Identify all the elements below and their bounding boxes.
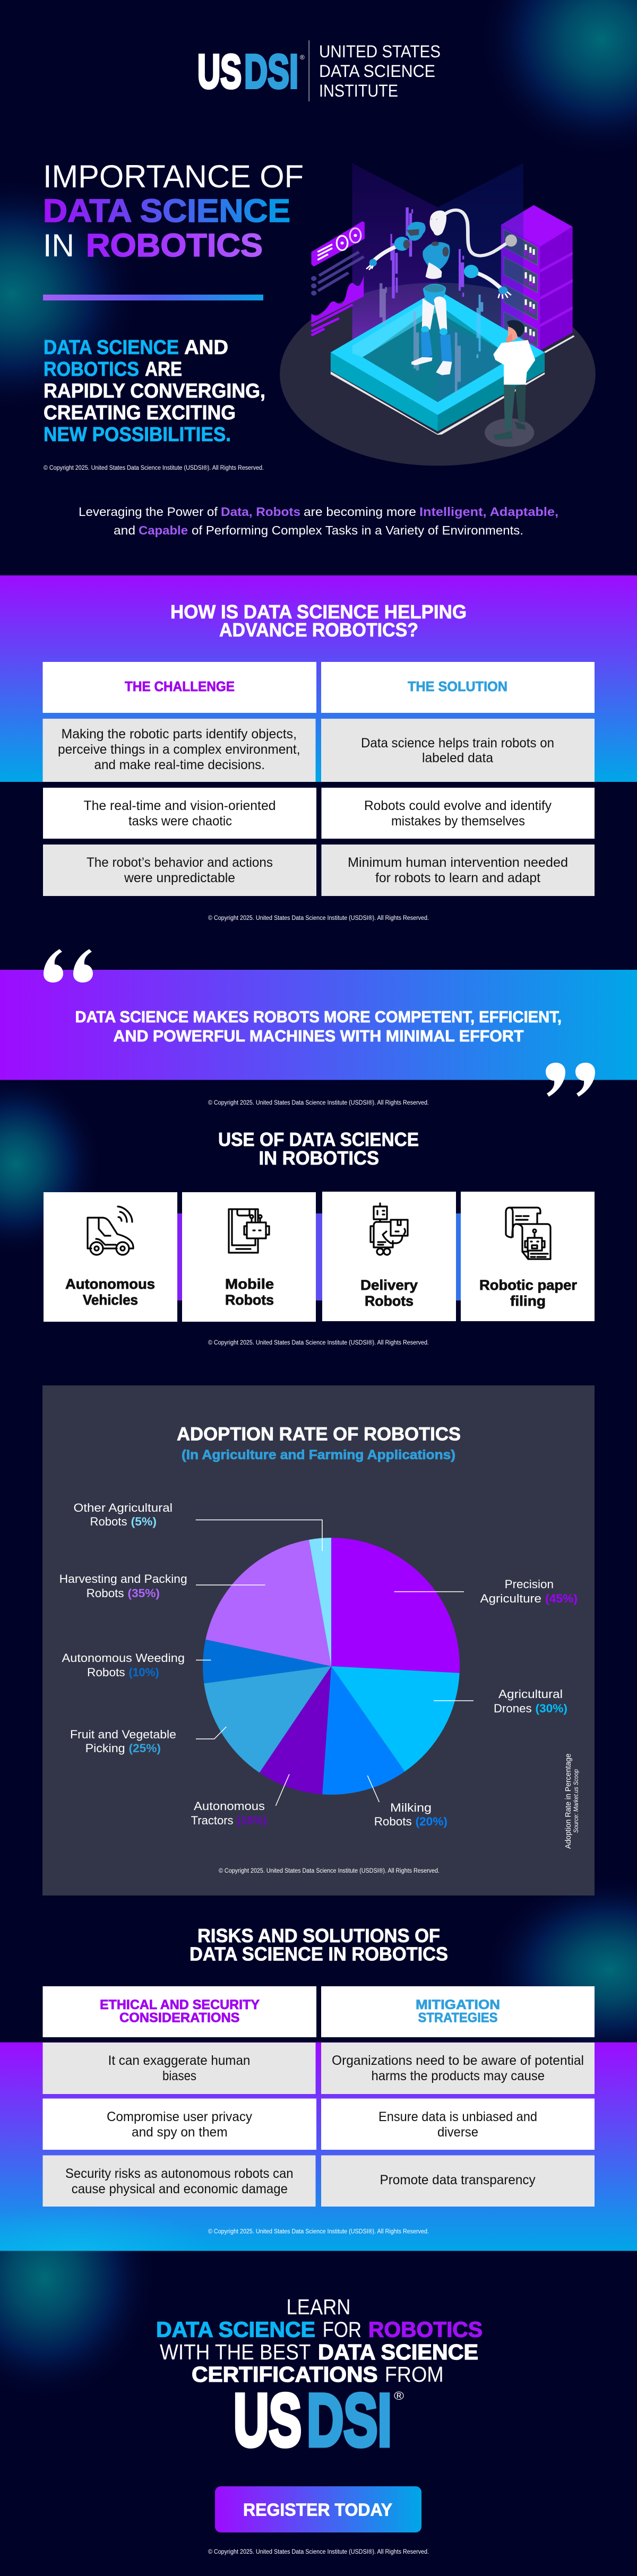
- logo: USDSI header: UNITED STATES: [319, 42, 441, 61]
- logo: USDSI footer: [234, 2378, 404, 2462]
- title underline bar: [43, 295, 263, 300]
- card: autonomous vehicles: Vehicles: [83, 1292, 138, 1308]
- subtitle statement: are becoming more: [304, 505, 416, 519]
- source note: [564, 1754, 580, 1849]
- title: ROBOTICS: [86, 227, 263, 263]
- icon: delivery robot: [371, 1203, 408, 1255]
- card: delivery robots: Robots: [365, 1293, 414, 1309]
- subtitle statement: Data, Robots: [221, 505, 300, 519]
- logo: USDSI footer: ®: [394, 2389, 404, 2402]
- chart heading: (In Agriculture and Farming Applications): [182, 1448, 455, 1462]
- robot: [366, 210, 517, 375]
- label: other agricultural robots: Other Agricultural: [73, 1501, 173, 1514]
- icon: autonomous car: [88, 1207, 133, 1255]
- call to action text: [156, 2295, 483, 2387]
- panel: risks and solutions: [0, 1928, 637, 2251]
- leader lines: [196, 1520, 474, 1806]
- pie chart: [203, 1538, 460, 1795]
- panel: how is data science helping: [0, 575, 637, 896]
- label: autonomous weeding robots: (10%): [128, 1666, 159, 1679]
- card: mobile robots: [182, 1192, 316, 1322]
- button: register today: [215, 2486, 421, 2532]
- table: ethical considerations and mitigation: diverse: [437, 2125, 478, 2140]
- label: fruit and vegetable picking: (25%): [128, 1742, 161, 1755]
- call to action text: ROBOTICS: [368, 2317, 483, 2342]
- chart heading: ADOPTION RATE OF ROBOTICS: [177, 1424, 461, 1445]
- label: other agricultural robots: Robots: [90, 1515, 127, 1528]
- label: fruit and vegetable picking: Fruit and Vegetable: [70, 1728, 176, 1741]
- server rack: [501, 205, 574, 352]
- chart heading: [177, 1424, 461, 1462]
- icon: phone with robot: [229, 1209, 269, 1253]
- card: delivery robots: Delivery: [360, 1277, 418, 1293]
- table: ethical considerations and mitigation: ETHICAL AND SECURITY: [100, 1997, 260, 2012]
- heading: how is data science helping: HOW IS DATA SCIENCE HELPING: [170, 601, 467, 623]
- label: harvesting and packing robots: [59, 1572, 187, 1600]
- table: challenge and solution: THE SOLUTION: [408, 678, 507, 694]
- intro statement: ROBOTICS: [44, 358, 139, 381]
- subtitle statement: Leveraging the Power of: [79, 505, 218, 519]
- card: mobile robots: Mobile: [225, 1276, 274, 1292]
- dashboard widgets: [311, 221, 365, 335]
- label: milking robots: [374, 1801, 447, 1828]
- copyright: © Copyright 2025. United States Data Science Institute (USDSI®). All Rights Reserved.: [208, 1340, 429, 1346]
- engineer: [485, 320, 535, 447]
- title: [43, 159, 304, 263]
- table: ethical considerations and mitigation: harms the products may cause: [372, 2069, 545, 2083]
- logo: USDSI header: ®: [300, 54, 305, 61]
- subtitle statement: Intelligent, Adaptable,: [419, 505, 558, 519]
- subtitle statement: and: [114, 523, 135, 537]
- heading: use of data science: [218, 1128, 419, 1169]
- title: IMPORTANCE OF: [43, 159, 304, 194]
- copyright: © Copyright 2025. United States Data Science Institute (USDSI®). All Rights Reserved.: [208, 2228, 429, 2235]
- table: ethical considerations and mitigation: Promote data transparency: [380, 2173, 536, 2187]
- card: robotic paper filing: [461, 1192, 595, 1321]
- label: precision agriculture: (45%): [545, 1592, 578, 1605]
- table: ethical considerations and mitigation: MITIGATION: [416, 1997, 500, 2012]
- intro statement: ARE: [145, 358, 182, 381]
- copyright: © Copyright 2025. United States Data Science Institute (USDSI®). All Rights Reserved.: [44, 465, 264, 471]
- table: challenge and solution: The real-time and vision-oriented: [84, 798, 276, 813]
- table: challenge and solution: were unpredictable: [124, 871, 235, 885]
- floor ellipse: [280, 282, 596, 466]
- quote text: AND POWERFUL MACHINES WITH MINIMAL EFFORT: [114, 1027, 524, 1045]
- logo: USDSI header: DATA SCIENCE: [319, 62, 435, 81]
- table: challenge and solution: mistakes by themselves: [391, 814, 525, 829]
- label: autonomous tractors: Tractors: [191, 1814, 234, 1827]
- heading: how is data science helping: [170, 601, 467, 641]
- heading: risks and solutions: [190, 1925, 448, 1965]
- copyright: © Copyright 2025. United States Data Science Institute (USDSI®). All Rights Reserved.: [208, 2549, 429, 2555]
- source note: Adoption Rate in Percentage: [564, 1754, 573, 1849]
- label: fruit and vegetable picking: Picking: [85, 1742, 125, 1755]
- subtitle statement: of Performing Complex Tasks in a Variety of Environments.: [192, 523, 523, 537]
- subtitle statement: Capable: [139, 523, 188, 537]
- label: fruit and vegetable picking: [70, 1728, 176, 1755]
- logo: USDSI header: [197, 40, 441, 101]
- table: ethical considerations and mitigation: Compromise user privacy: [107, 2109, 252, 2124]
- heading: risks and solutions: DATA SCIENCE IN ROBOTICS: [190, 1943, 448, 1965]
- table: challenge and solution: Making the robotic parts identify objects,: [62, 727, 297, 742]
- table: challenge and solution: tasks were chaotic: [128, 814, 232, 829]
- card: delivery robots: [322, 1192, 456, 1321]
- table: ethical considerations and mitigation: It can exaggerate human: [108, 2053, 250, 2068]
- table: ethical considerations and mitigation: Ensure data is unbiased and: [378, 2109, 537, 2124]
- source note: Source: Market.us Scoop: [572, 1769, 580, 1833]
- call to action text: FROM: [385, 2362, 444, 2387]
- copyright: © Copyright 2025. United States Data Science Institute (USDSI®). All Rights Reserved.: [219, 1868, 440, 1874]
- heading: use of data science: USE OF DATA SCIENCE: [218, 1128, 419, 1150]
- copyright: © Copyright 2025. United States Data Science Institute (USDSI®). All Rights Reserved.: [208, 915, 429, 921]
- label: other agricultural robots: [73, 1501, 173, 1528]
- icon: opening quote mark: [44, 949, 93, 983]
- illustration: robot, platform, server and engineer: [280, 163, 596, 466]
- copyright: © Copyright 2025. United States Data Science Institute (USDSI®). All Rights Reserved.: [208, 1100, 429, 1106]
- call to action text: DATA SCIENCE: [156, 2317, 315, 2342]
- call to action text: LEARN: [287, 2295, 350, 2319]
- table: challenge and solution: labeled data: [422, 751, 493, 765]
- label: harvesting and packing robots: Robots: [87, 1587, 124, 1600]
- label: precision agriculture: [480, 1578, 578, 1605]
- panel: quote banner: [0, 949, 637, 1097]
- label: other agricultural robots: (5%): [131, 1515, 157, 1528]
- table: challenge and solution: Minimum human intervention needed: [348, 855, 568, 870]
- label: harvesting and packing robots: Harvesting and Packing: [59, 1572, 187, 1586]
- intro statement: RAPIDLY CONVERGING,: [44, 380, 265, 402]
- table: challenge and solution: for robots to learn and adapt: [375, 871, 540, 885]
- label: autonomous weeding robots: Autonomous Weeding: [62, 1651, 185, 1665]
- panel: adoption rate chart: [42, 1385, 595, 1896]
- icon: paper scroll with robot: [506, 1208, 550, 1259]
- table: challenge and solution: THE CHALLENGE: [125, 678, 235, 694]
- table: ethical considerations and mitigation: [42, 1986, 595, 2207]
- table: ethical considerations and mitigation: STRATEGIES: [418, 2011, 498, 2026]
- intro statement: AND: [184, 337, 228, 359]
- table: ethical considerations and mitigation: Security risks as autonomous robots can: [65, 2166, 293, 2181]
- call to action text: WITH THE BEST: [160, 2340, 311, 2364]
- card: mobile robots: Robots: [225, 1292, 274, 1308]
- subtitle statement: [79, 505, 558, 537]
- label: milking robots: Robots: [374, 1815, 412, 1828]
- card: autonomous vehicles: [44, 1192, 177, 1322]
- call to action text: CERTIFICATIONS: [192, 2362, 378, 2387]
- table: challenge and solution: [42, 662, 595, 896]
- intro statement: NEW POSSIBILITIES.: [44, 424, 231, 446]
- data rain: [390, 208, 464, 298]
- table: ethical considerations and mitigation: CONSIDERATIONS: [119, 2011, 240, 2026]
- label: milking robots: (20%): [415, 1815, 447, 1828]
- table: ethical considerations and mitigation: cause physical and economic damage: [72, 2182, 288, 2196]
- label: autonomous weeding robots: [62, 1651, 185, 1679]
- label: harvesting and packing robots: (35%): [127, 1587, 160, 1600]
- label: agricultural drones: [494, 1687, 567, 1715]
- label: autonomous tractors: (15%): [237, 1814, 267, 1827]
- label: autonomous tractors: [191, 1799, 267, 1827]
- label: autonomous weeding robots: Robots: [87, 1666, 125, 1679]
- title: DATA SCIENCE: [43, 193, 290, 229]
- label: precision agriculture: Precision: [505, 1578, 554, 1591]
- label: autonomous tractors: Autonomous: [194, 1799, 265, 1813]
- table: challenge and solution: and make real-time decisions.: [94, 757, 265, 772]
- logo: USDSI footer: US: [234, 2378, 302, 2462]
- intro statement: [44, 337, 265, 446]
- panel: use cases: [44, 1192, 595, 1322]
- label: milking robots: Milking: [390, 1801, 432, 1814]
- intro statement: CREATING EXCITING: [44, 402, 236, 424]
- logo: USDSI footer: DSI: [307, 2378, 392, 2462]
- label: agricultural drones: Agricultural: [498, 1687, 563, 1701]
- call to action text: FOR: [323, 2317, 361, 2342]
- table: challenge and solution: perceive things in a complex environment,: [58, 742, 300, 757]
- intro statement: DATA SCIENCE: [44, 337, 179, 359]
- table: challenge and solution: The robot’s behavior and actions: [87, 855, 273, 870]
- title: IN: [43, 228, 74, 263]
- table: challenge and solution: Data science helps train robots on: [361, 736, 554, 751]
- platform: [331, 290, 545, 435]
- call to action text: DATA SCIENCE: [318, 2340, 478, 2364]
- holographic back panels: [352, 163, 437, 402]
- card: autonomous vehicles: Autonomous: [65, 1276, 155, 1292]
- icon: closing quote mark: [546, 1063, 595, 1097]
- logo: USDSI header: DSI: [244, 46, 298, 99]
- heading: how is data science helping: ADVANCE ROBOTICS?: [219, 619, 418, 641]
- quote text: DATA SCIENCE MAKES ROBOTS MORE COMPETENT, EFFICIENT,: [75, 1007, 562, 1026]
- logo: USDSI header: US: [197, 46, 242, 99]
- logo: USDSI header: INSTITUTE: [319, 81, 398, 100]
- heading: use of data science: IN ROBOTICS: [259, 1147, 379, 1169]
- button: register today: REGISTER TODAY: [243, 2500, 392, 2519]
- heading: risks and solutions: RISKS AND SOLUTIONS OF: [197, 1925, 440, 1946]
- label: precision agriculture: Agriculture: [480, 1592, 541, 1605]
- table: challenge and solution: Robots could evolve and identify: [364, 798, 552, 813]
- quote text: [75, 1007, 562, 1045]
- table: ethical considerations and mitigation: and spy on them: [132, 2125, 228, 2140]
- card: robotic paper filing: filing: [510, 1293, 546, 1309]
- label: agricultural drones: Drones: [494, 1702, 532, 1715]
- table: ethical considerations and mitigation: Organizations need to be aware of potential: [332, 2053, 584, 2068]
- card: robotic paper filing: Robotic paper: [479, 1277, 577, 1293]
- label: agricultural drones: (30%): [535, 1702, 567, 1715]
- table: ethical considerations and mitigation: biases: [162, 2069, 196, 2083]
